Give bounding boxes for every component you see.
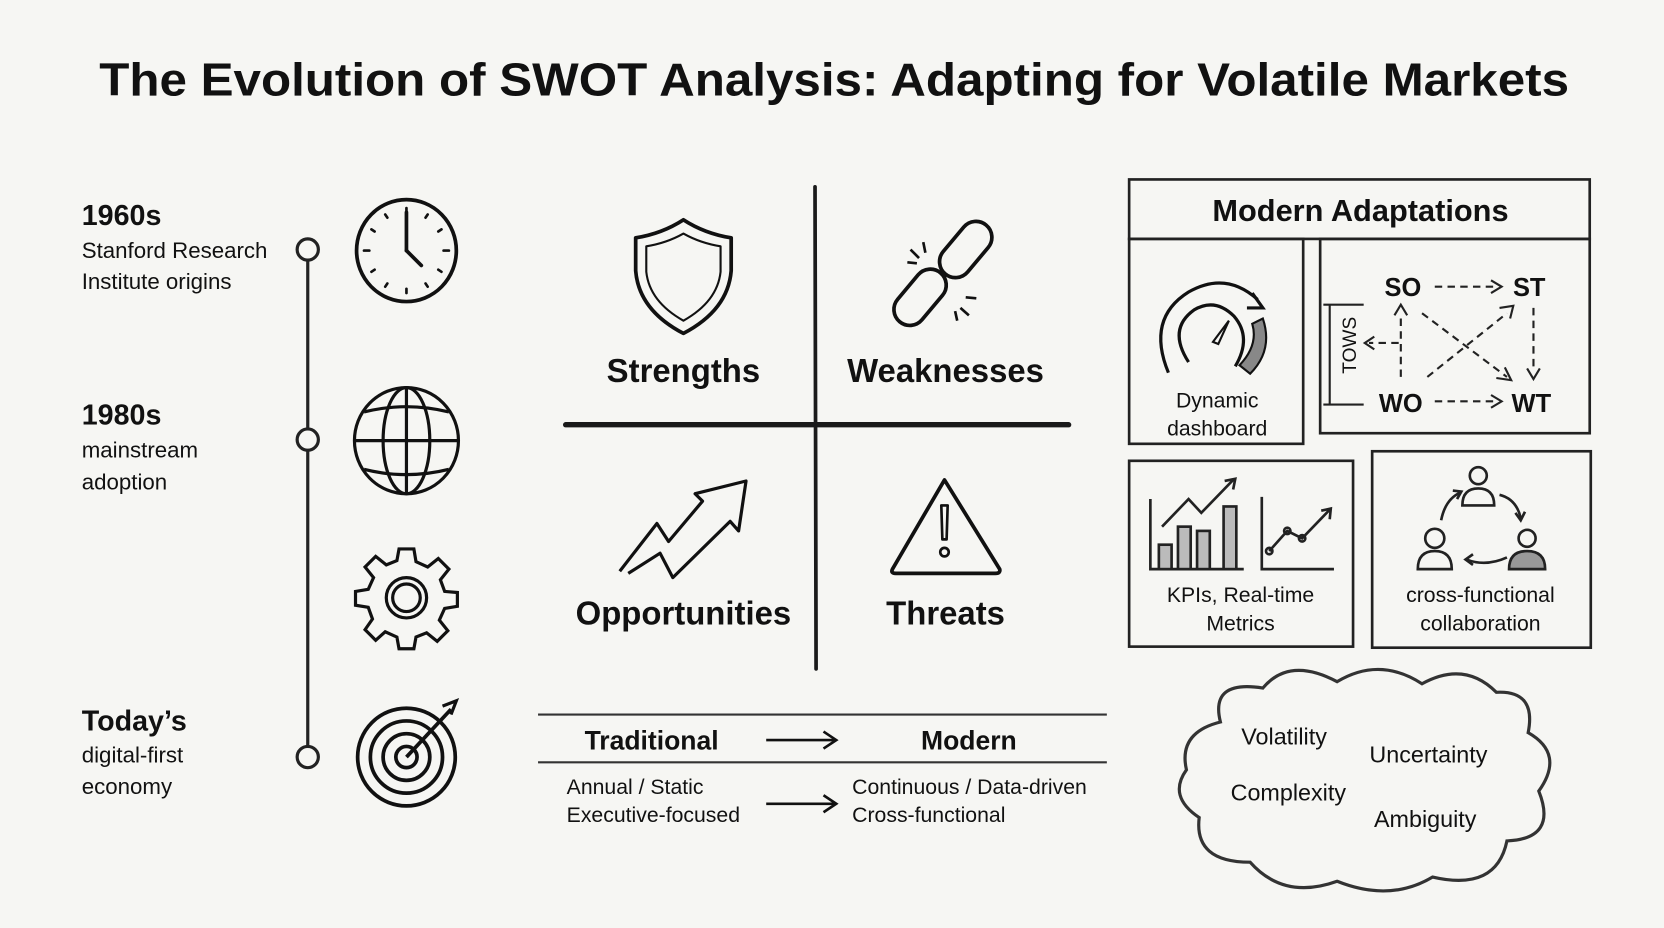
timeline text: 1980s: adoption bbox=[82, 469, 167, 494]
cloud: VUCA bbox=[1179, 669, 1550, 891]
cloud: VUCA: Volatility bbox=[1241, 723, 1327, 749]
title: The Evolution of SWOT Analysis: Adapting for Volatile Markets bbox=[99, 54, 1569, 106]
TOWS matrix: WO bbox=[1379, 390, 1423, 418]
TOWS matrix: WT bbox=[1512, 390, 1552, 418]
icon: KPI charts bbox=[1150, 479, 1334, 569]
quadrant labels bbox=[576, 352, 1044, 631]
icon: target bbox=[358, 701, 456, 806]
infographic canvas: Dynamic bbox=[1176, 390, 1259, 413]
icon: gear bbox=[356, 549, 457, 649]
timeline text: 1980s: mainstream bbox=[82, 438, 198, 463]
icon: dashboard bbox=[1161, 283, 1266, 374]
timeline text: today: Today’s bbox=[82, 706, 187, 738]
comparison table bbox=[538, 715, 1107, 827]
infographic canvas: Metrics bbox=[1206, 613, 1275, 636]
comparison table: Continuous / Data-driven bbox=[852, 776, 1087, 799]
icon: growth arrow bbox=[620, 481, 746, 578]
panel: modern adaptations bbox=[1129, 179, 1591, 648]
cloud: VUCA: Ambiguity bbox=[1374, 806, 1477, 832]
comparison table: Modern bbox=[921, 726, 1017, 756]
quadrant labels: Strengths bbox=[607, 352, 760, 389]
timeline bbox=[297, 239, 318, 768]
infographic canvas: cross-functional bbox=[1406, 584, 1555, 607]
timeline text: 1980s bbox=[82, 400, 198, 494]
infographic canvas: dashboard bbox=[1167, 417, 1267, 440]
heading: modern adaptations: Modern Adaptations bbox=[1212, 193, 1509, 228]
quadrant labels: Threats bbox=[886, 594, 1005, 631]
cloud: VUCA: Complexity bbox=[1231, 780, 1346, 806]
icon: globe bbox=[354, 388, 458, 494]
timeline text: today: economy bbox=[82, 774, 173, 799]
icon: broken chain bbox=[887, 215, 998, 332]
comparison table: Executive-focused bbox=[567, 804, 740, 827]
cloud: VUCA: Uncertainty bbox=[1369, 741, 1488, 767]
icon: warning bbox=[892, 480, 1000, 573]
TOWS matrix: TOWS bbox=[1340, 317, 1361, 374]
quadrant labels: Opportunities bbox=[576, 594, 791, 631]
icon: clock bbox=[357, 200, 456, 302]
comparison table: Annual / Static bbox=[567, 776, 704, 799]
timeline text: 1980s: 1980s bbox=[82, 400, 161, 432]
SWOT cross bbox=[566, 187, 1069, 669]
timeline text: today bbox=[82, 706, 187, 799]
timeline text: 1960s bbox=[82, 200, 267, 294]
timeline text: 1960s: Stanford Research bbox=[82, 238, 267, 263]
quadrant labels: Weaknesses bbox=[847, 352, 1044, 389]
timeline text: today: digital-first bbox=[82, 742, 184, 767]
timeline text: 1960s: 1960s bbox=[82, 200, 161, 232]
comparison table: Cross-functional bbox=[852, 804, 1005, 827]
infographic canvas: KPIs, Real-time bbox=[1167, 584, 1314, 607]
TOWS matrix: SO bbox=[1385, 274, 1421, 302]
comparison table: Traditional bbox=[585, 726, 719, 756]
infographic canvas: collaboration bbox=[1420, 613, 1541, 636]
timeline text: 1960s: Institute origins bbox=[82, 269, 232, 294]
icon: shield bbox=[636, 220, 731, 333]
TOWS matrix: ST bbox=[1513, 274, 1546, 302]
TOWS matrix bbox=[1323, 274, 1552, 418]
icon: collaboration bbox=[1418, 467, 1545, 569]
